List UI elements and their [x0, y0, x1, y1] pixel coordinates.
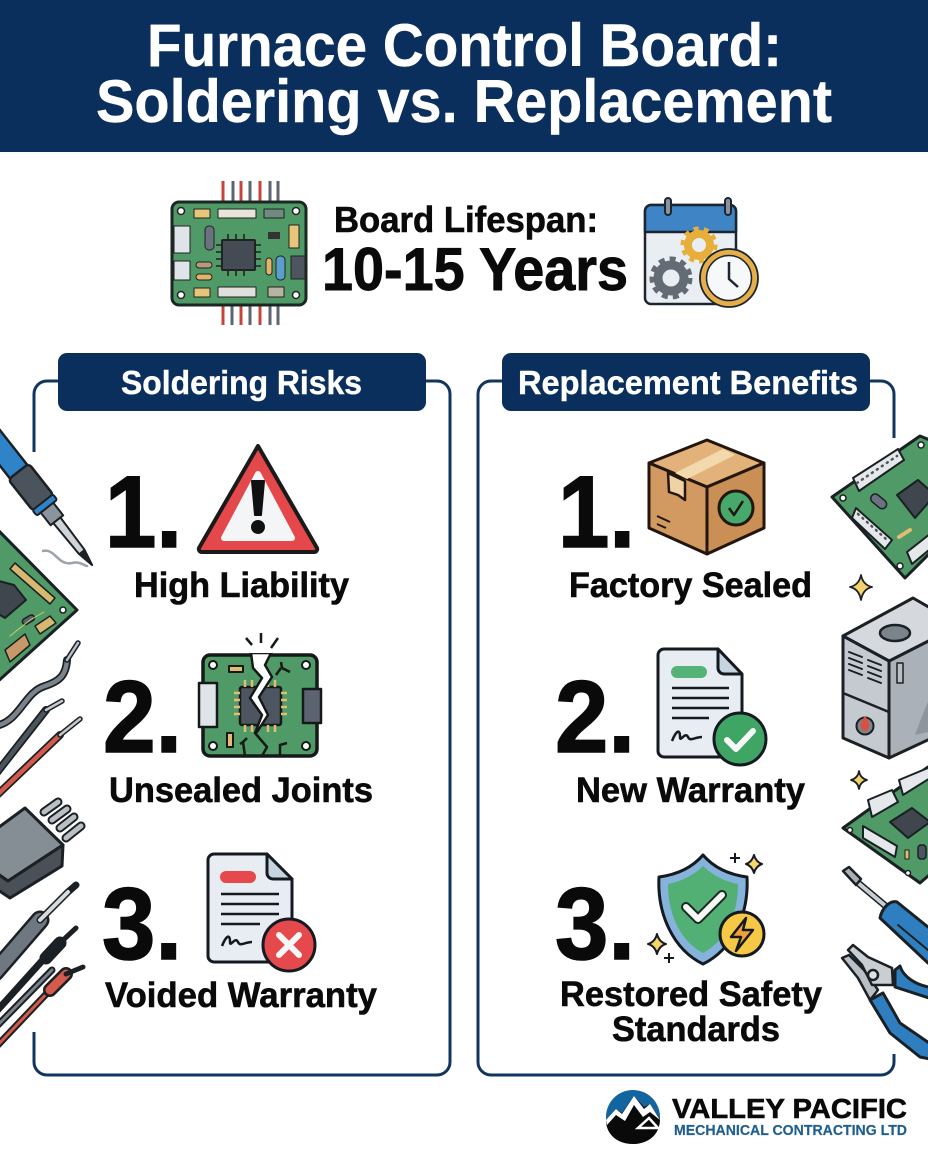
icon: document with red cross: [208, 854, 315, 971]
title banner: Furnace Control Board:: [147, 12, 782, 79]
risk 1: high liability: High Liability: [134, 566, 350, 605]
icon: wires: [0, 643, 80, 797]
risk 2: unsealed joints: Unsealed Joints: [109, 771, 373, 810]
heading: soldering risks: Soldering Risks: [121, 364, 362, 401]
risk 2: unsealed joints: [103, 633, 373, 810]
icon: top replacement board: [832, 436, 928, 578]
icon: sealed box with check: [649, 440, 764, 554]
benefit 2: new warranty: New Warranty: [576, 771, 806, 810]
icon: connector block: [0, 802, 81, 898]
title banner: Soldering vs. Replacement: [96, 68, 832, 135]
icon: probes: [0, 885, 83, 1048]
benefit 3: restored safety standards: 3.: [555, 867, 635, 981]
company logo: [606, 1090, 907, 1144]
logo wordmark: MECHANICAL CONTRACTING LTD: [674, 1123, 907, 1139]
risk 3: voided warranty: Voided Warranty: [105, 976, 378, 1015]
benefit 1: factory sealed: [558, 440, 812, 605]
risk 1: high liability: 1.: [105, 455, 182, 569]
risk 2: unsealed joints: 2.: [103, 660, 182, 774]
benefit 3: restored safety standards: Restored Safety: [560, 975, 823, 1014]
icon: left circuit board: [0, 527, 77, 684]
icon: shield with check and bolt: [648, 853, 764, 964]
sparkle: [850, 575, 872, 600]
risk 1: high liability: [105, 446, 350, 605]
sparkle: [851, 771, 867, 789]
heading: soldering risks: [58, 353, 426, 411]
icon: furnace unit: [843, 598, 928, 758]
benefit 1: factory sealed: 1.: [558, 455, 635, 569]
icon: cracked circuit board: [199, 633, 321, 756]
benefit 1: factory sealed: Factory Sealed: [569, 566, 812, 605]
panel: replacement benefits: [478, 353, 894, 1075]
benefit 3: restored safety standards: Standards: [612, 1010, 780, 1049]
lifespan heading: [322, 199, 628, 303]
icon: document with green check: [658, 649, 766, 765]
icon: circuit board with wires: [172, 181, 306, 325]
risk 3: voided warranty: [102, 854, 378, 1015]
benefit 3: restored safety standards: [555, 853, 823, 1049]
panel: soldering risks: [34, 353, 450, 1075]
heading: replacement benefits: Replacement Benefits: [518, 364, 858, 401]
benefit 2: new warranty: 2.: [555, 660, 635, 774]
risk 3: voided warranty: 3.: [102, 867, 182, 981]
lifespan heading: Board Lifespan:: [334, 199, 598, 240]
heading: replacement benefits: [502, 353, 870, 411]
left tools illustration: [0, 416, 102, 1048]
icon: calendar, gears and clock: [645, 198, 758, 307]
icon: pliers: [842, 945, 928, 1060]
icon: warning triangle: [199, 446, 317, 552]
right tools illustration: [832, 436, 928, 1060]
icon: lower replacement board: [843, 765, 928, 883]
logo wordmark: VALLEY PACIFIC: [672, 1093, 907, 1124]
icon: screwdriver: [843, 867, 928, 963]
title banner: [0, 0, 928, 152]
benefit 2: new warranty: [555, 649, 806, 810]
smoke wisp: [43, 551, 87, 566]
icon: soldering iron: [0, 416, 102, 573]
logo wordmark: [672, 1093, 907, 1139]
logo mark: mountain in circle: [606, 1090, 660, 1144]
lifespan heading: 10-15 Years: [322, 236, 628, 303]
